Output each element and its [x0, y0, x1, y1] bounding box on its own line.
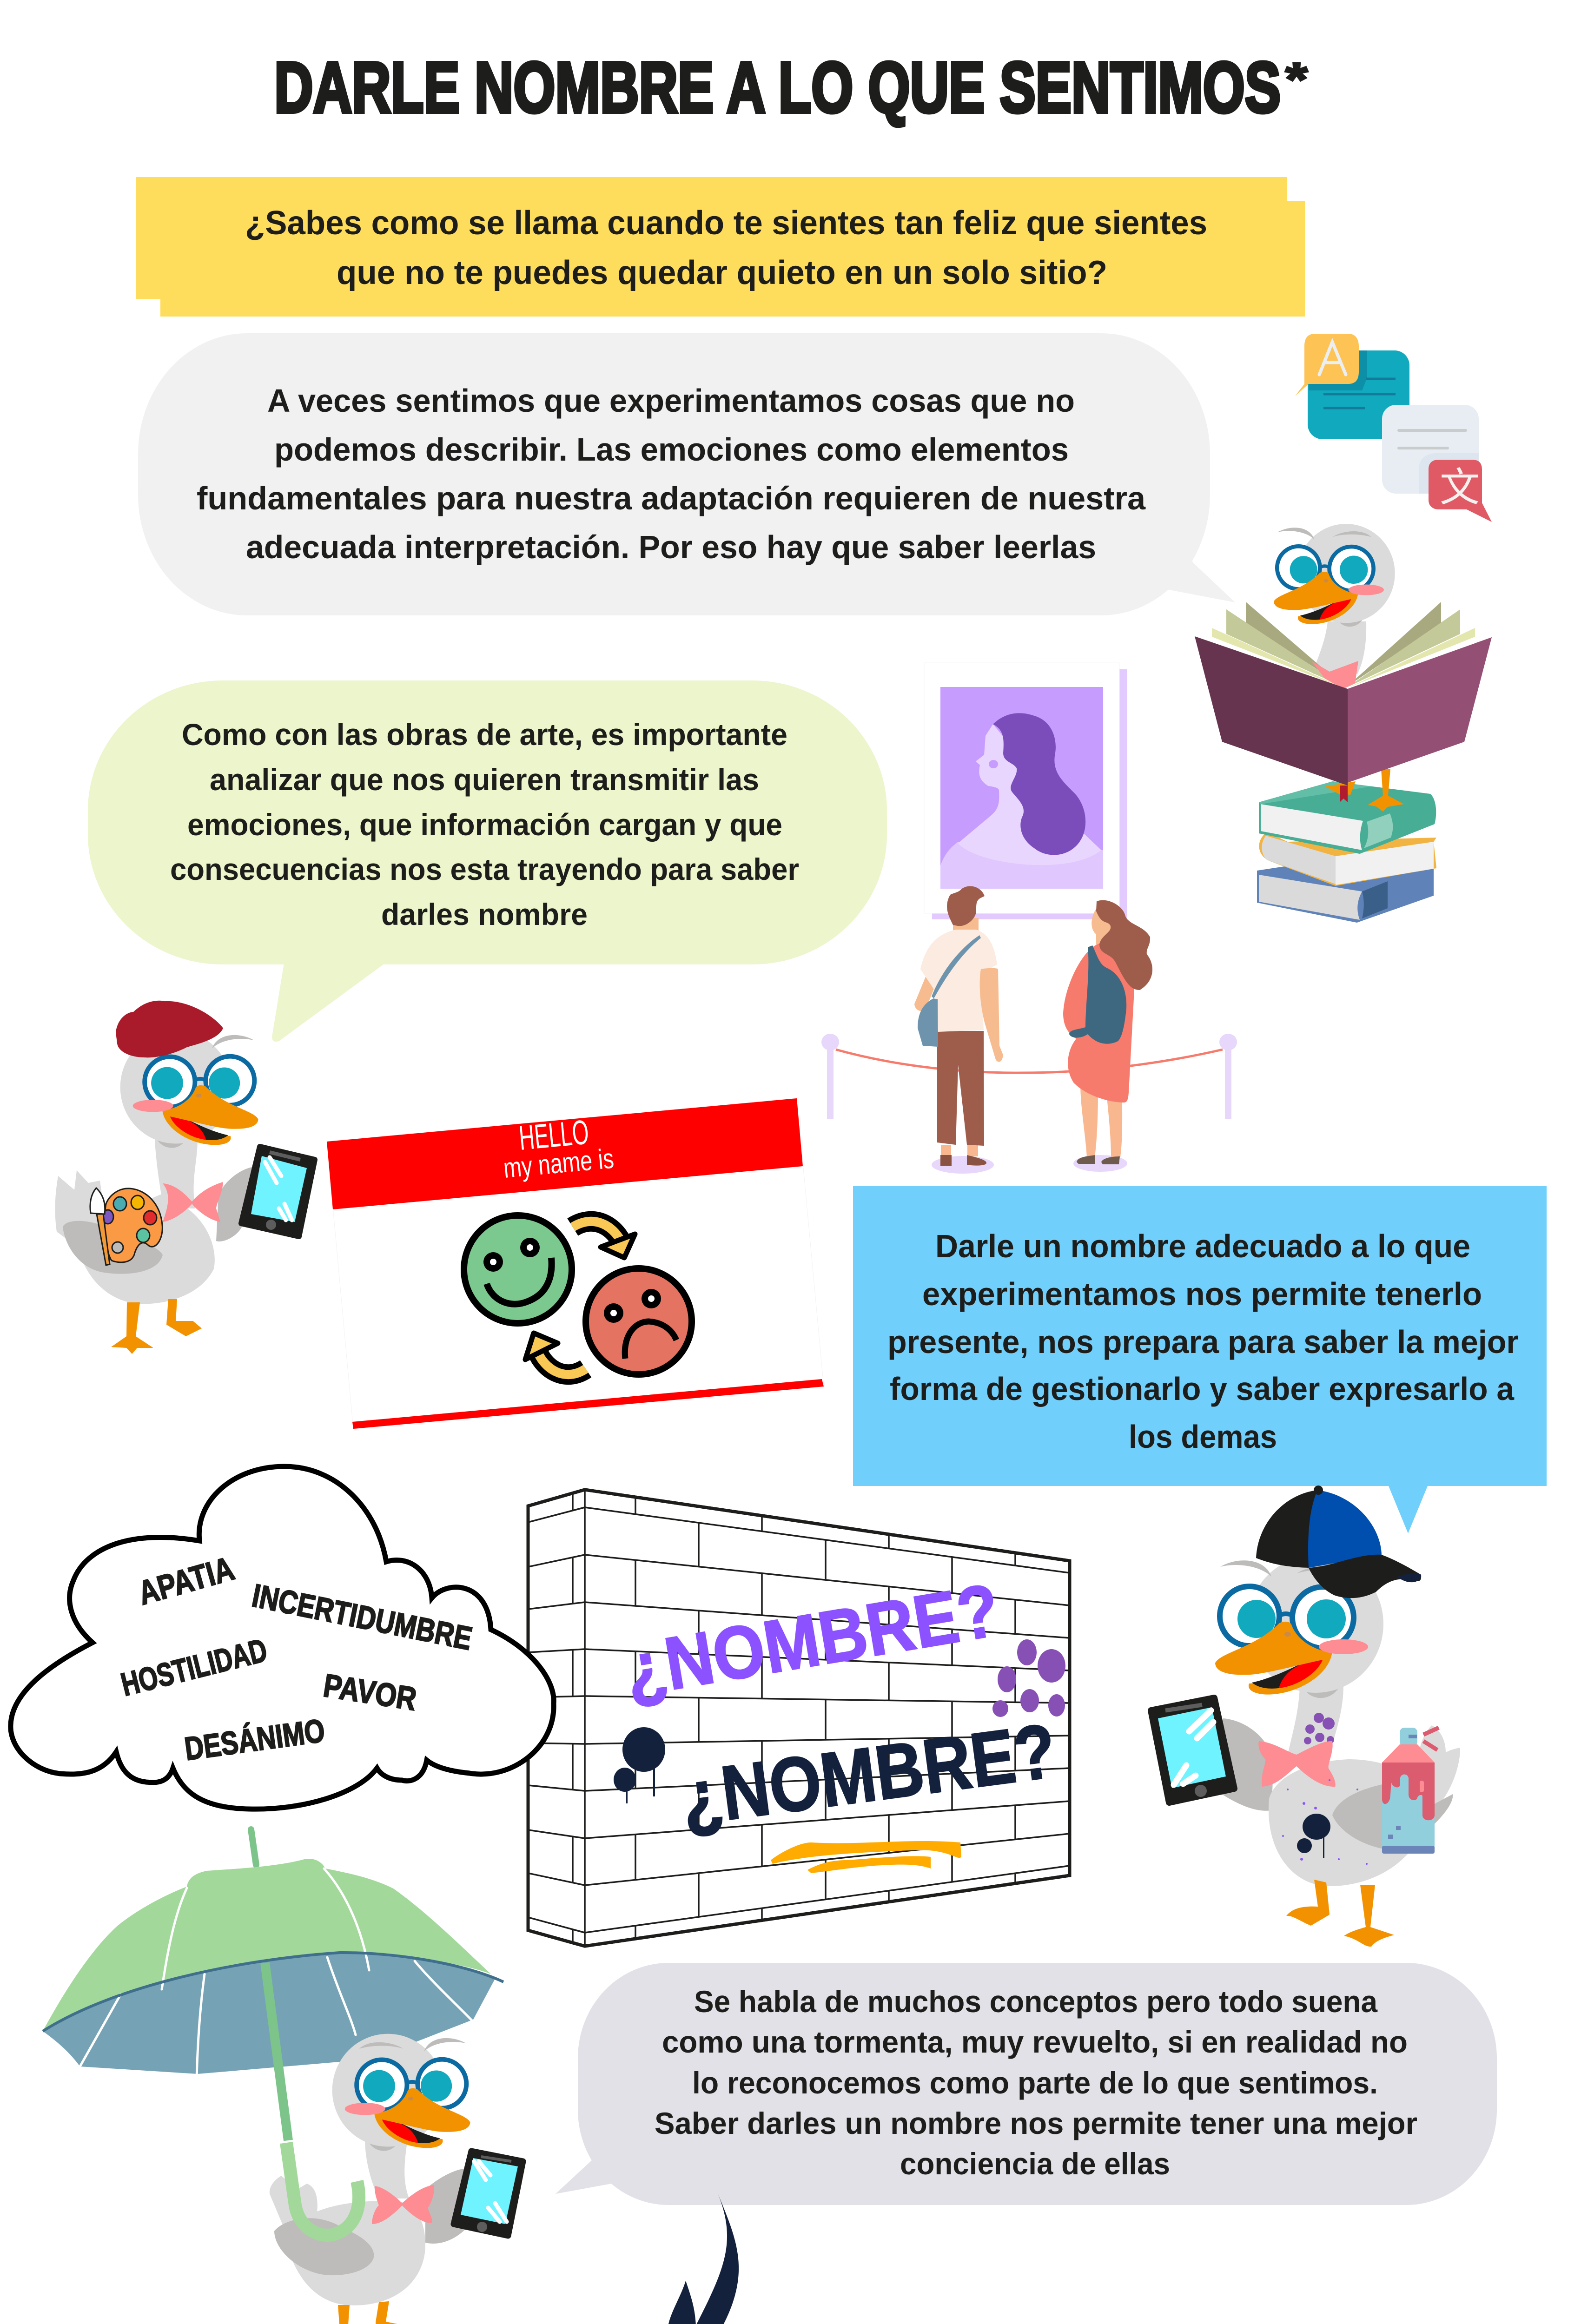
panel: yellow question banner: [136, 177, 1305, 317]
art text: analizar que nos quieren transmitir las: [210, 762, 759, 797]
duck head: [1274, 524, 1395, 627]
spray can: [1382, 1728, 1439, 1854]
orange scribble: [771, 1841, 961, 1873]
stack of books: [1257, 781, 1436, 923]
tail: [270, 2176, 318, 2238]
purple paint blots: [992, 1639, 1065, 1717]
man: [914, 886, 1003, 1174]
open book cover: [1195, 636, 1492, 802]
character: painter duck with beret: [55, 1001, 315, 1354]
neck: [155, 1139, 198, 1208]
right wing: [425, 2168, 468, 2244]
title: DARLE NOMBRE A LO QUE SENTIMOS: [274, 47, 1281, 127]
storm text: conciencia de ellas: [900, 2146, 1170, 2181]
left wing: [1222, 1718, 1274, 1811]
neck paint blots: [1304, 1713, 1335, 1744]
intro text: [197, 383, 1146, 565]
brick wall with graffiti: [528, 1490, 1070, 1946]
art text: Como con las obras de arte, es importante: [182, 717, 787, 752]
tag heading: [502, 1113, 615, 1184]
emotion words: DESÁNIMO: [182, 1712, 327, 1767]
character: duck under umbrella: [43, 1829, 523, 2324]
arrow: happy to sad: [573, 1221, 635, 1258]
storm text: como una tormenta, muy revuelto, si en realidad no: [662, 2025, 1408, 2059]
wall: [528, 1490, 1070, 1946]
emotion words: HOSTILIDAD: [118, 1631, 271, 1703]
umbrella handle: [286, 2143, 359, 2235]
bow tie: [372, 2185, 434, 2224]
duck bow: [1311, 661, 1358, 689]
wing: [274, 2218, 374, 2275]
body: [74, 1195, 215, 1304]
panel: blue text box: [853, 1186, 1547, 1533]
speech bubble: art analogy: [88, 680, 887, 1042]
arrow: down to exercise: [667, 2193, 739, 2324]
paint brush: [90, 1188, 110, 1265]
tag heading: my name is: [502, 1142, 615, 1184]
intro text: A veces sentimos que experimentamos cosas que no: [267, 383, 1075, 419]
arrow: sad to happy: [525, 1333, 586, 1374]
blue box text: forma de gestionarlo y saber expresarlo a: [890, 1371, 1515, 1407]
umbrella canopy top: [43, 1859, 491, 2031]
storm text: Saber darles un nombre nos permite tener una mejor: [655, 2106, 1417, 2140]
head: [120, 1031, 258, 1148]
paint palette: [102, 1188, 162, 1262]
intro text: adecuada interpretación. Por eso hay que saber leerlas: [246, 529, 1096, 565]
art text: [170, 717, 799, 931]
title: *: [1285, 53, 1308, 106]
wing: [1332, 1780, 1413, 1851]
tail: [1417, 1725, 1460, 1813]
spray speckles: [1282, 1779, 1368, 1865]
tag heading: HELLO: [517, 1113, 590, 1157]
navy graffiti: ¿NOMBRE?: [676, 1708, 1061, 1842]
head: [1215, 1555, 1383, 1698]
rope barrier: [821, 1034, 1237, 1119]
legs and feet: [323, 2301, 412, 2324]
tablet: [454, 2151, 523, 2236]
umbrella ribs: [80, 1868, 477, 2079]
blue box text: los demas: [1129, 1419, 1277, 1455]
intro text: fundamentales para nuestra adaptación requieren de nuestra: [197, 480, 1146, 516]
blue box text: experimentamos nos permite tenerlo: [922, 1276, 1482, 1312]
speech bubble: intro: [138, 333, 1235, 615]
tablet: [1151, 1698, 1234, 1802]
woman: [1063, 900, 1152, 1172]
question text: [245, 205, 1207, 291]
beret: [116, 1001, 223, 1057]
sad face: [586, 1268, 692, 1374]
body: [288, 2200, 425, 2305]
blue box text: [887, 1228, 1519, 1455]
red footer band: [352, 1379, 824, 1429]
wing: [63, 1221, 163, 1274]
blue box text: presente, nos prepara para saber la mejor: [887, 1324, 1519, 1360]
purple graffiti: ¿NOMBRE?: [619, 1568, 1005, 1712]
art text: darles nombre: [381, 897, 588, 931]
legs and feet: [1286, 1880, 1394, 1947]
navy paint blots: [614, 1727, 665, 1803]
question text: que no te puedes quedar quieto en un solo sitio?: [337, 254, 1107, 291]
speech bubble: storm: [556, 1963, 1497, 2205]
art text: consecuencias nos esta trayendo para saber: [170, 852, 799, 886]
cap: [1256, 1486, 1421, 1598]
name tag: [327, 1098, 824, 1429]
emotion words: [118, 1550, 475, 1767]
art text: emociones, que información cargan y que: [187, 807, 782, 842]
framed painting: [924, 663, 1127, 919]
thought cloud: [11, 1466, 554, 1809]
storm text: lo reconocemos como parte de lo que sentimos.: [692, 2066, 1378, 2100]
illustration: couple in the art gallery: [821, 663, 1237, 1174]
character: duck with cap and spray can: [1151, 1486, 1460, 1947]
tablet: [241, 1147, 315, 1236]
umbrella rim: [43, 1953, 503, 2031]
tail: [55, 1170, 107, 1255]
question text: ¿Sabes como se llama cuando te sientes tan feliz que sientes: [245, 205, 1207, 242]
head: [332, 2034, 470, 2151]
bow tie: [163, 1182, 223, 1222]
happy face: [464, 1215, 572, 1323]
emotion words: APATIA: [134, 1550, 238, 1612]
chest paint blots: [1297, 1814, 1330, 1858]
emotion words: INCERTIDUMBRE: [249, 1577, 475, 1657]
right wing: [216, 1167, 256, 1241]
bow tie: [1258, 1741, 1336, 1787]
book pages: [1212, 602, 1475, 688]
duck feet: [1325, 769, 1404, 812]
character: duck reading a book on a stack of books: [1195, 524, 1492, 923]
tag body: [327, 1098, 824, 1429]
storm text: [655, 1984, 1417, 2181]
duck neck: [1313, 621, 1366, 674]
body: [1269, 1759, 1432, 1886]
emotion words: PAVOR: [321, 1667, 419, 1717]
storm text: Se habla de muchos conceptos pero todo suena: [694, 1984, 1378, 2019]
blue box text: Darle un nombre adecuado a lo que: [935, 1228, 1470, 1264]
neck: [365, 2139, 409, 2199]
intro text: podemos describir. Las emociones como elementos: [274, 431, 1069, 468]
neck: [1288, 1685, 1343, 1755]
umbrella canopy underside: [43, 1953, 495, 2074]
red header band: [327, 1098, 803, 1209]
icon: translation bubbles: [1295, 334, 1492, 522]
umbrella spike: [251, 1829, 256, 1865]
legs and feet: [111, 1299, 202, 1354]
icon: translation bubbles: 文: [1440, 465, 1480, 510]
umbrella shaft: [265, 1963, 288, 2140]
